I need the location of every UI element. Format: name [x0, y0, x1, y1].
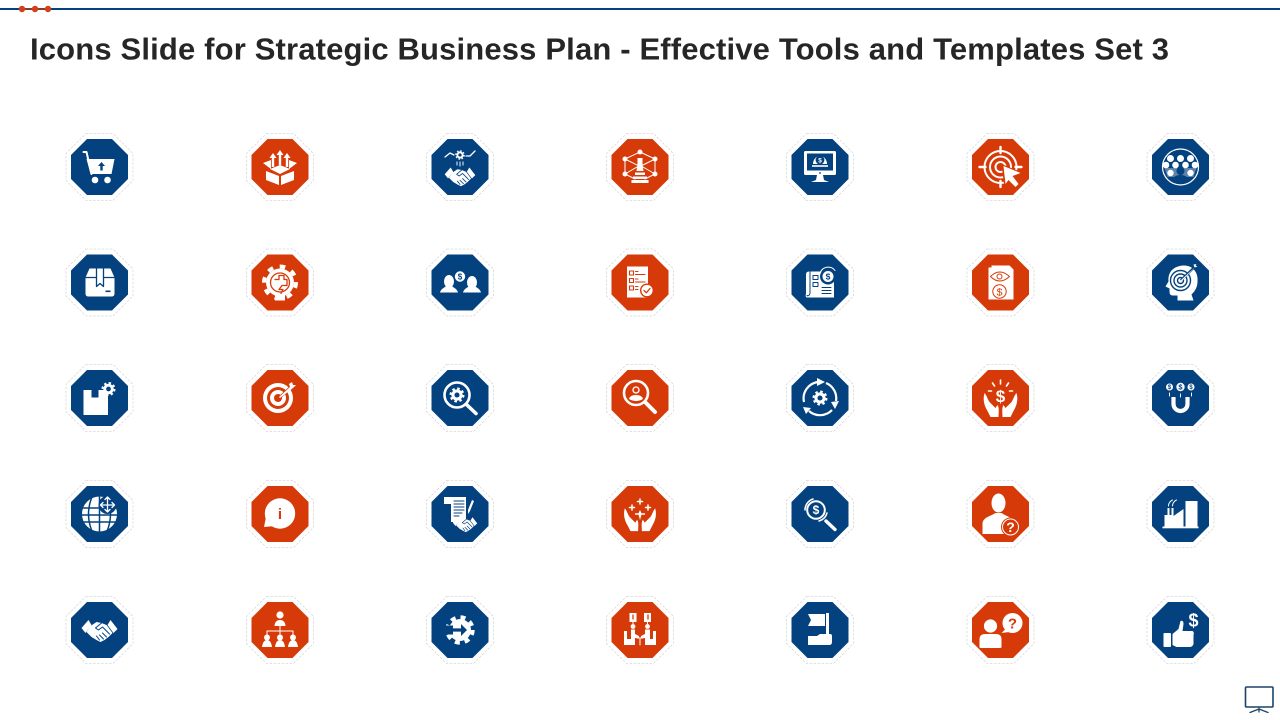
- icon: hand holding flag: [786, 596, 854, 664]
- icon: thumbs up with dollar: $: [1188, 610, 1199, 630]
- icon: hands with dollar: $: [996, 387, 1006, 406]
- icon: magnet with coins: $: [1189, 385, 1193, 391]
- icon: handshake: [66, 596, 133, 664]
- icon: eye and dollar document: [967, 249, 1034, 316]
- top decorative rule: [0, 6, 1280, 12]
- icon: box with gear: [66, 364, 133, 432]
- icon: monitor with coin: [786, 134, 854, 200]
- icon: magnet with coins: $: [1168, 385, 1172, 391]
- icon: magnifier with dollar: $: [813, 503, 820, 517]
- icon: person asking question: ?: [1008, 616, 1017, 632]
- icon: monitor with coin: $: [818, 157, 822, 164]
- icon: blueprint with coin: [786, 249, 854, 316]
- icon: person with question: ?: [1006, 519, 1015, 535]
- icon: dartboard: [246, 364, 314, 432]
- icon: head with target: [1147, 249, 1214, 316]
- icon: growth handshake: [426, 134, 494, 200]
- icon: meeting with two boards: [606, 596, 674, 664]
- icon: crowd in a circle: [1147, 134, 1214, 200]
- icon: cycle with gear: [786, 364, 854, 432]
- icon: magnifier with dollar: [786, 480, 854, 548]
- icon: factory: [1147, 480, 1214, 548]
- icon: parcel: [66, 249, 133, 316]
- icon: info speech bubble: i: [278, 506, 282, 523]
- icon: checklist: [606, 249, 674, 316]
- icon: presentation screen: [1246, 687, 1273, 712]
- icon: info speech bubble: [246, 480, 314, 548]
- icon: magnifier with person: [606, 364, 674, 432]
- icon: open box with arrows: [246, 134, 314, 200]
- icon: magnifier with gear: [426, 364, 494, 432]
- icon: org chart: [246, 596, 314, 664]
- icon: gear bulb puzzle: [246, 249, 314, 316]
- icon: eye and dollar document: $: [997, 286, 1003, 298]
- icon: chess pawn network: [606, 134, 674, 200]
- icon: contract with handshake: [426, 480, 494, 548]
- icon: person asking question: [967, 596, 1034, 664]
- icon: magnet with coins: $: [1178, 383, 1183, 392]
- icon: magnet with coins: [1147, 364, 1214, 432]
- icon: two people and coin: $: [458, 272, 463, 282]
- title: Icons Slide for Strategic Business Plan - Effective Tools and Templates Set 3: [30, 32, 1169, 66]
- icon: blueprint with coin: $: [826, 272, 831, 282]
- icon: person with question: [967, 480, 1034, 548]
- icon: thumbs up with dollar: [1147, 596, 1214, 664]
- icon: hands with dollar: [967, 364, 1034, 432]
- icon: target with cursor: [967, 134, 1034, 200]
- icon: globe with move arrows: [66, 480, 133, 548]
- icon: two people and coin: [426, 249, 494, 316]
- icon: shopping cart: [66, 134, 133, 200]
- icon: hands with sparkles: [606, 480, 674, 548]
- icon: gear with arrow: [426, 596, 494, 664]
